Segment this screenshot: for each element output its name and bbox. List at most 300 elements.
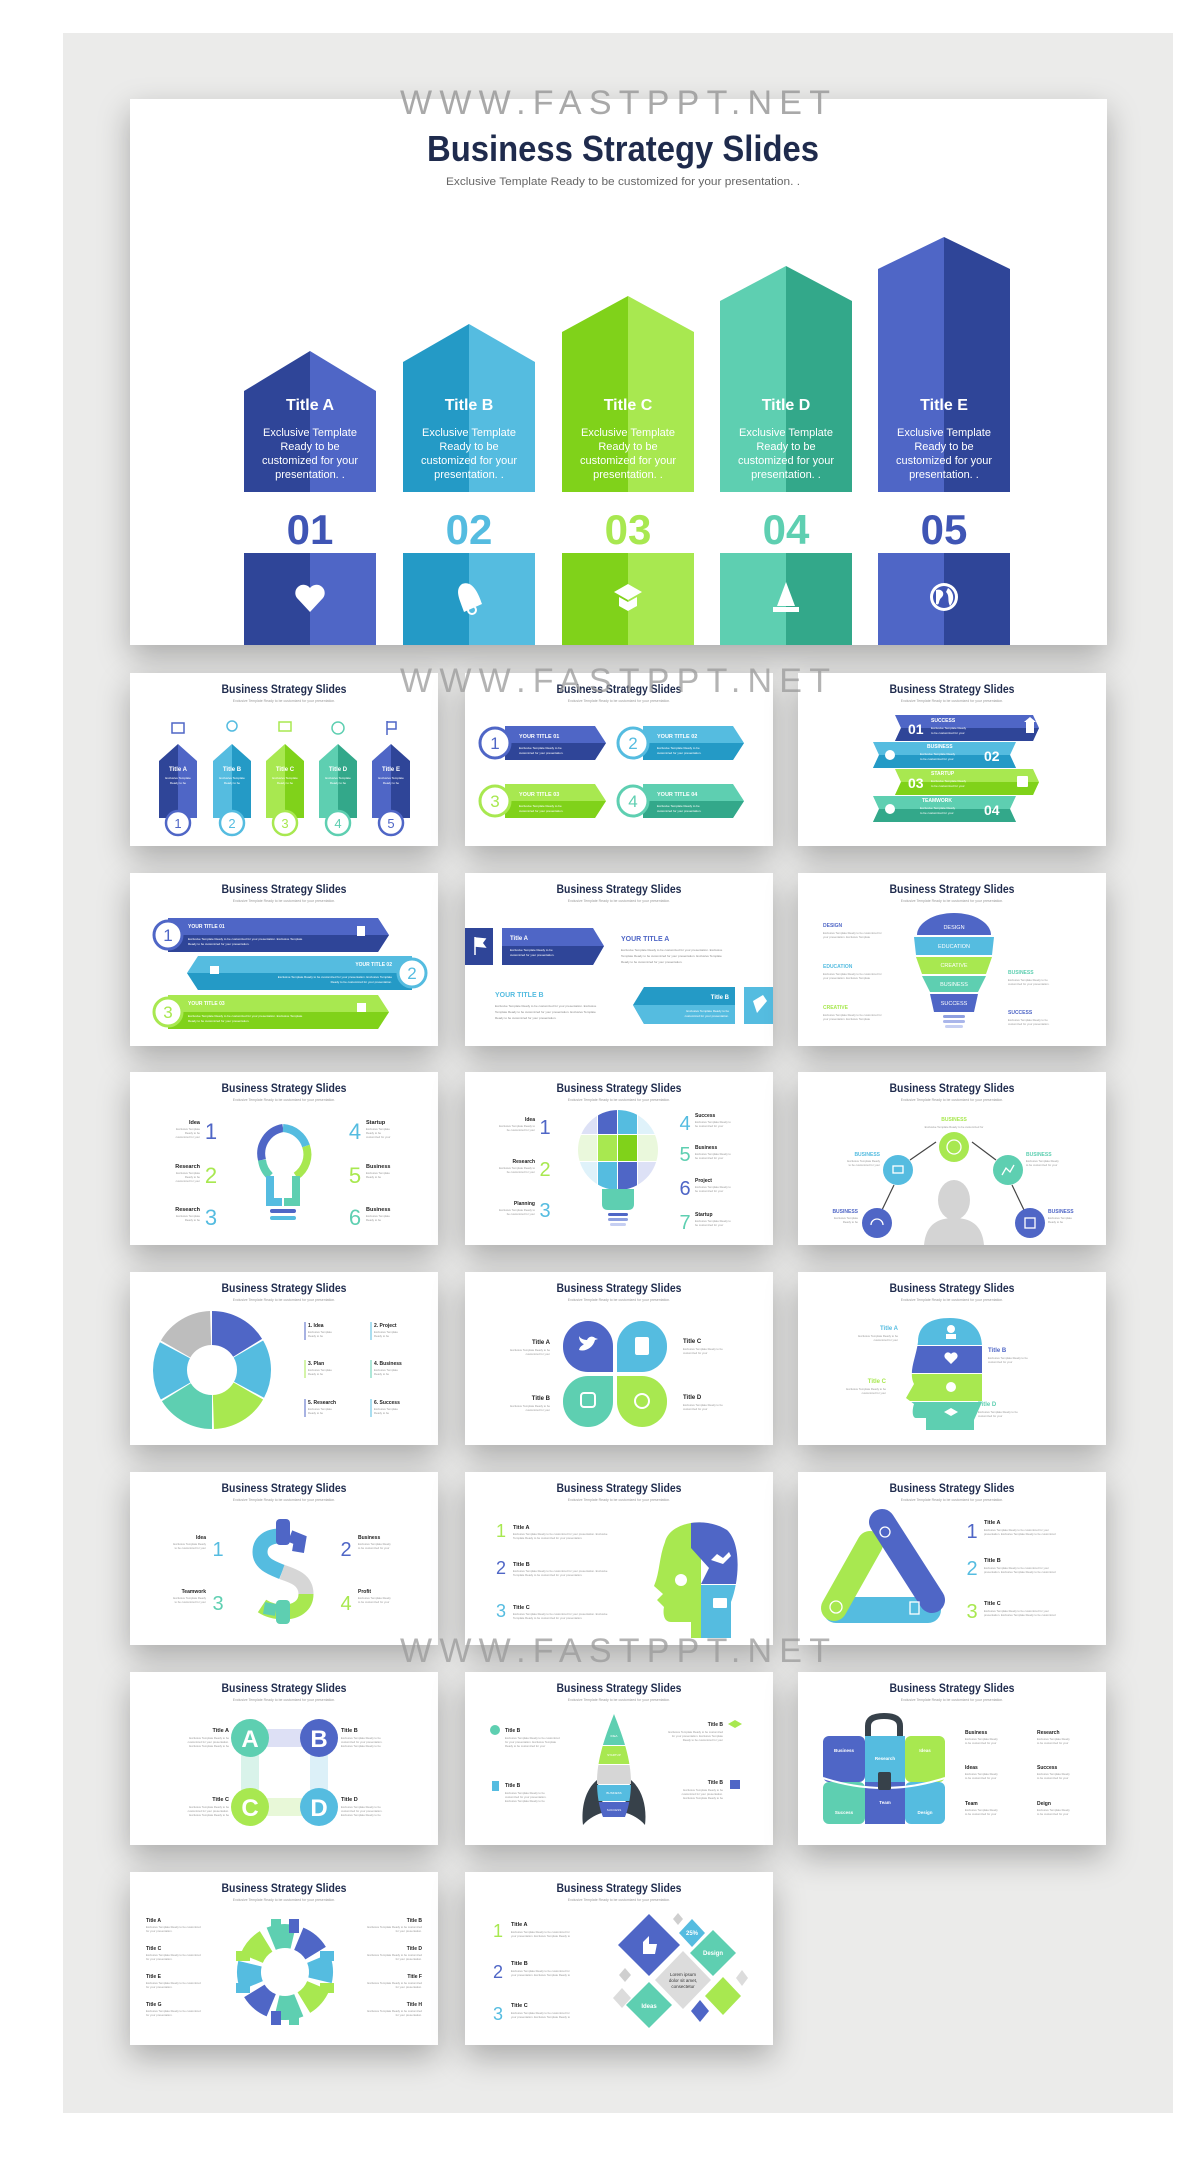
list labels: 6. Success	[374, 1400, 400, 1406]
thumb 18: briefcase: to be customized for your	[965, 1741, 996, 1745]
side labels: SUCCESS	[1008, 1010, 1033, 1016]
thumb 1: five arrows with icons	[130, 673, 438, 846]
thumb 19: gear of eight: for your presentation.	[146, 2013, 173, 2017]
icon box 3: graduation cap	[562, 553, 694, 645]
thumb title	[556, 882, 682, 903]
connectors and circles: C	[241, 1795, 259, 1822]
diamond cluster: Design	[703, 1951, 723, 1957]
thumb 11: four-leaf social: customized for your	[526, 1352, 550, 1356]
briefcase: Business	[834, 1748, 854, 1753]
thumb title: Exclusive Template Ready to be customized for your presentation.	[901, 899, 1003, 903]
watermark middle: WWW.FASTPPT.NET	[400, 662, 830, 700]
thumb 19: gear of eight: for your presentation.	[396, 1957, 422, 1961]
thumb 19: gear of eight: for your presentation.	[146, 1957, 173, 1961]
thumb 18: briefcase	[798, 1672, 1106, 1845]
arrow C: customized for your	[580, 455, 676, 467]
thumb 18: briefcase: Exclusive Template Ready	[965, 1772, 998, 1776]
numbered labels: 1	[966, 1521, 978, 1543]
labels: Title D	[683, 1395, 702, 1401]
column arrows: Title D	[329, 767, 348, 773]
thumb title: Business Strategy Slides	[890, 1281, 1015, 1295]
thumb 16: ABCD circles: Exclusive Template Ready to be	[341, 1813, 381, 1817]
thumb 19: gear of eight: for your presentation.	[146, 1985, 173, 1989]
labels: Title B	[708, 1780, 723, 1786]
list labels: Exclusive Template	[308, 1330, 332, 1334]
numbered labels: 7	[679, 1212, 691, 1234]
labels: Title A	[532, 1340, 551, 1346]
chevrons: 2	[628, 734, 638, 753]
thumb 20: diamonds: Exclusive Template Ready to be customized for	[511, 1969, 570, 1973]
thumb 16: ABCD circles: customized for your presentation.	[188, 1740, 229, 1744]
thumb title	[222, 1481, 347, 1502]
thumb 7: bulb outline 1-6: customized for your	[366, 1135, 390, 1139]
labels: BUSINESS	[941, 1117, 967, 1123]
thumb 11: four-leaf social: customized for your	[683, 1407, 707, 1411]
chevrons: YOUR TITLE 01	[519, 734, 559, 740]
labels: Title C	[146, 1946, 162, 1952]
chevrons: 3	[490, 792, 500, 811]
thumb 19: gear of eight: Exclusive Template Ready to be customized	[146, 1981, 201, 1985]
arrow A: presentation. .	[275, 469, 345, 481]
labels: customized for your presentation.	[682, 1792, 723, 1796]
labels: BUSINESS	[1026, 1152, 1052, 1158]
side labels: CREATIVE	[823, 1005, 849, 1011]
thumb 15: triangle cycle: Exclusive Template Ready to be customized for your	[984, 1609, 1049, 1613]
column arrows: Title B	[223, 767, 242, 773]
watermark top: WWW.FASTPPT.NET	[400, 84, 830, 122]
labels: Title C	[868, 1379, 887, 1385]
arrow A: Ready to be	[280, 441, 340, 453]
title A block: Title A	[510, 936, 529, 942]
thumb 8: bulb grid 1-7: Research	[512, 1159, 535, 1165]
thumb 13: dollar sign: Idea	[196, 1535, 206, 1541]
thumb 16: ABCD circles: Exclusive Template Ready to be	[189, 1736, 229, 1740]
chevrons: YOUR TITLE 04	[657, 792, 698, 798]
numbered labels: 2	[493, 1962, 503, 1982]
labels: Title B	[341, 1728, 358, 1734]
thumb title	[556, 1881, 682, 1902]
business circles	[862, 1132, 1045, 1238]
thumb 7: bulb outline 1-6: Exclusive Template	[176, 1214, 200, 1218]
side labels: customized for your presentation.	[1008, 982, 1050, 986]
thumb 17: rocket	[465, 1672, 773, 1845]
thumb 15: triangle cycle: presentation. Exclusive Template Ready to be customized	[984, 1532, 1056, 1536]
thumb title: Exclusive Template Ready to be customized for your presentation.	[568, 1298, 670, 1302]
arrow B: presentation. .	[434, 469, 504, 481]
main slide: business strategy arrows	[130, 99, 1107, 645]
labels: Title F	[407, 1974, 422, 1980]
title: Business Strategy Slides	[427, 128, 819, 169]
zigzag bands: to be customized for your	[920, 757, 954, 761]
labels	[532, 1339, 702, 1402]
thumb title: Exclusive Template Ready to be customized for your presentation.	[233, 1898, 335, 1902]
thumb 7: bulb outline 1-6: Ready to be	[185, 1218, 200, 1222]
connectors and circles: D	[310, 1795, 328, 1822]
arrow C: Title C	[604, 397, 653, 414]
connectors and circles	[231, 1719, 338, 1826]
arrow C: presentation. .	[593, 469, 663, 481]
side labels: Exclusive Template Ready to be	[1008, 1018, 1048, 1022]
numbered labels: 3	[205, 1205, 217, 1230]
side labels: Exclusive Template Ready to be customized for	[823, 972, 882, 976]
numbered labels: 4	[349, 1119, 361, 1144]
thumb title: Business Strategy Slides	[222, 882, 347, 896]
thumb title: Exclusive Template Ready to be customized for your presentation.	[901, 1498, 1003, 1502]
thumb 7: bulb outline 1-6: Business	[366, 1164, 390, 1170]
thumb title	[556, 682, 682, 703]
thumb 9: person with business circles: Exclusive Template Ready	[1026, 1159, 1059, 1163]
numbers: 02	[446, 506, 492, 553]
bulb bands: DESIGN	[943, 925, 965, 931]
thumb title	[222, 1081, 347, 1102]
thumb title	[890, 1081, 1015, 1102]
thumb 14: puzzle head 1-3: Exclusive Template Ready to be customized for your presentation. Exclusive	[513, 1532, 608, 1536]
thumb title: Business Strategy Slides	[890, 1481, 1015, 1495]
labels: customized for your presentation.	[505, 1795, 547, 1799]
thumb title: Business Strategy Slides	[556, 1081, 682, 1095]
labels: Title A	[212, 1728, 229, 1734]
arrow A: Exclusive Template	[263, 427, 357, 439]
labels: Title D	[978, 1402, 997, 1408]
numbered labels: 3	[496, 1601, 506, 1621]
thumb 9: person with business circles: Ready to be	[1048, 1220, 1064, 1224]
numbered labels: 5	[679, 1144, 691, 1166]
watermark lower: WWW.FASTPPT.NET	[400, 1632, 830, 1670]
thumb title	[556, 1481, 682, 1502]
labels: Title A	[146, 1918, 161, 1924]
bulb grid	[575, 1108, 662, 1226]
thumb 8: bulb grid 1-7: Exclusive Template Ready to	[499, 1124, 535, 1128]
thumb 7: bulb outline 1-6: Ready to be	[185, 1175, 200, 1179]
list labels: Exclusive Template	[308, 1407, 332, 1411]
thumb 9: person with business circles: Exclusive Template Ready to be customized for	[925, 1125, 983, 1129]
thumb 14: puzzle head 1-3	[465, 1472, 773, 1645]
bulb bands: BUSINESS	[940, 982, 968, 988]
list labels: Ready to be	[308, 1372, 324, 1376]
diamond cluster	[613, 1913, 748, 2028]
numbered labels	[539, 1113, 691, 1234]
thumb 16: ABCD circles: customized for your presentation.	[341, 1809, 383, 1813]
numbered labels: 3	[493, 2004, 503, 2024]
thumb 19: gear of eight: for your presentation.	[396, 1929, 422, 1933]
thumb 7: bulb outline 1-6: Ready to be	[185, 1131, 200, 1135]
column arrows: Ready to be	[170, 781, 186, 785]
thumb 14: puzzle head 1-3: Title A	[513, 1525, 530, 1531]
triangle	[830, 1522, 932, 1614]
thumb 8: bulb grid 1-7: Startup	[695, 1212, 712, 1218]
icon box 2: bell	[403, 553, 535, 645]
side labels: Exclusive Template Ready to be customized for	[823, 1013, 882, 1017]
arrow B: Title B	[445, 397, 493, 414]
side labels: Exclusive Template Ready to be customized for	[823, 931, 882, 935]
thumb 20: diamonds	[465, 1872, 773, 2045]
chevrons: customized for your presentation.	[519, 751, 564, 755]
thumb title	[556, 1081, 682, 1102]
thumb 12: head with four bands: customized for your	[874, 1338, 898, 1342]
thumb 12: head with four bands: customized for your	[862, 1391, 886, 1395]
labels: Title B	[407, 1918, 422, 1924]
thumb 9: person with business circles: Exclusive Template	[834, 1216, 858, 1220]
labels: Title H	[407, 2002, 422, 2008]
column arrows: Exclusive Template	[165, 776, 191, 780]
thumb 13: dollar sign: Exclusive Template Ready	[173, 1596, 207, 1600]
thumb 7: bulb outline 1-6: Research	[175, 1207, 201, 1213]
side labels: your presentation. Exclusive Template	[823, 935, 870, 939]
thumb 2: four numbered chevrons	[465, 673, 773, 846]
labels: Exclusive Template Ready to be	[505, 1799, 545, 1803]
subtitle: Exclusive Template Ready to be customized for your presentation. .	[446, 176, 800, 188]
zigzag bands: STARTUP	[931, 771, 955, 777]
thumb 7: bulb outline 1-6: Ready to be	[366, 1131, 382, 1135]
thumb 9: person with business circles: Exclusive Template Ready	[847, 1159, 881, 1163]
silhouette	[924, 1180, 984, 1245]
bulb bands: SUCCESS	[941, 1001, 968, 1007]
labels: for your presentation. Exclusive Template	[505, 1740, 557, 1744]
thumb title	[890, 1681, 1015, 1702]
head bands	[906, 1318, 982, 1430]
banners	[154, 918, 426, 1029]
thumb 13: dollar sign: Exclusive Template Ready	[358, 1596, 391, 1600]
bulb bands: EDUCATION	[938, 944, 970, 950]
thumb 14: puzzle head 1-3: Title B	[513, 1562, 530, 1568]
thumb title: Exclusive Template Ready to be customized for your presentation.	[568, 699, 670, 703]
thumb 16: ABCD circles: Exclusive Template Ready to be	[189, 1805, 229, 1809]
thumb 7: bulb outline 1-6: Exclusive Template	[366, 1214, 390, 1218]
thumb 8: bulb grid 1-7: Exclusive Template Ready to	[499, 1166, 535, 1170]
labels	[965, 1730, 1060, 1807]
thumb 14: puzzle head 1-3: Template Ready to be customized for your presentation.	[513, 1536, 583, 1540]
column arrows: Title C	[276, 767, 295, 773]
labels: Ready to be customized for your	[683, 1738, 723, 1742]
thumb 3: zigzag steps	[798, 673, 1106, 846]
labels	[212, 1728, 358, 1803]
side labels: EDUCATION	[823, 964, 853, 970]
thumb 20: diamonds: Exclusive Template Ready to be customized for	[511, 1930, 570, 1934]
arrow E: Ready to be	[914, 441, 974, 453]
thumb 15: triangle cycle	[798, 1472, 1106, 1645]
thumb 7: bulb outline 1-6: Exclusive Template	[366, 1171, 390, 1175]
column arrows: Ready to be	[330, 781, 346, 785]
column arrows: Ready to be	[277, 781, 293, 785]
thumb 7: bulb outline 1-6: Ready to be	[366, 1175, 382, 1179]
thumb title: Business Strategy Slides	[556, 682, 682, 696]
numbered labels: 4	[679, 1113, 691, 1135]
labels: Deign	[1037, 1801, 1051, 1807]
dollar shape	[260, 1519, 306, 1624]
column arrows: Title A	[169, 767, 188, 773]
numbers: 01	[287, 506, 333, 553]
numbered labels: 4	[340, 1593, 352, 1615]
title B block: customized for your presentation.	[685, 1014, 729, 1018]
arrow E: presentation. .	[909, 469, 979, 481]
numbered labels: 3	[212, 1593, 224, 1615]
labels: Title B	[988, 1348, 1007, 1354]
chevrons	[480, 726, 744, 818]
zigzag bands: Exclusive Template Ready	[920, 752, 956, 756]
thumb title: Business Strategy Slides	[556, 1281, 682, 1295]
list labels: Ready to be	[374, 1372, 390, 1376]
labels: Exclusive Template Ready to be	[683, 1796, 723, 1800]
thumb 8: bulb grid 1-7: be customized for your	[507, 1170, 535, 1174]
chevrons: 1	[490, 734, 500, 753]
thumb 7: bulb outline 1-6	[130, 1072, 438, 1245]
thumb 9: person with business circles: Ready to be	[843, 1220, 858, 1224]
banners: Exclusive Template Ready to be customized for your presentation. Exclusive Template	[188, 937, 303, 941]
icon box 5: globe	[878, 553, 1010, 645]
thumb 4: three long banners	[130, 873, 438, 1046]
thumb 20: diamonds: Title B	[511, 1961, 528, 1967]
diamond cluster: consectetur	[671, 1984, 695, 1989]
banners: Ready to be customized for your presentation.	[188, 942, 250, 946]
thumb title	[890, 882, 1015, 903]
thumb 13: dollar sign: to be customized for your	[358, 1600, 389, 1604]
thumb 13: dollar sign: Profit	[358, 1589, 371, 1595]
thumb 15: triangle cycle: presentation. Exclusive Template Ready to be customized	[984, 1570, 1056, 1574]
rocket: SUCCESS	[607, 1808, 621, 1812]
thumb 20: diamonds: Title A	[511, 1922, 528, 1928]
thumb title: Business Strategy Slides	[222, 1481, 347, 1495]
zigzag bands: BUSINESS	[927, 744, 953, 750]
arrow D: Exclusive Template	[739, 427, 833, 439]
thumb 18: briefcase: to be customized for your	[1037, 1812, 1068, 1816]
numbered circles: 3	[281, 816, 289, 831]
side labels: your presentation. Exclusive Template	[823, 976, 870, 980]
thumb 18: briefcase: to be customized for your	[965, 1776, 996, 1780]
thumb 14: puzzle head 1-3: Template Ready to be customized for your presentation.	[513, 1573, 583, 1577]
list labels: Exclusive Template	[374, 1368, 398, 1372]
column arrows: Ready to be	[224, 781, 240, 785]
title B block: Exclusive Template Ready to be	[686, 1009, 729, 1013]
thumb 12: head with four bands: Exclusive Template Ready to be	[846, 1387, 886, 1391]
connectors and circles: A	[241, 1726, 259, 1753]
thumb title: Business Strategy Slides	[890, 682, 1015, 696]
thumb 8: bulb grid 1-7: Exclusive Template Ready to	[695, 1152, 731, 1156]
thumb title	[556, 1681, 682, 1702]
numbered circles: 5	[387, 816, 395, 831]
numbered labels: 1	[205, 1119, 217, 1144]
numbers: 04	[763, 506, 810, 553]
numbered labels	[205, 1119, 361, 1230]
thumb title: Exclusive Template Ready to be customized for your presentation.	[568, 1698, 670, 1702]
title B block: Title B	[711, 995, 730, 1001]
thumb 20: diamonds: Exclusive Template Ready to be customized for	[511, 2011, 570, 2015]
numbered labels: 1	[493, 1921, 503, 1941]
top icons	[172, 721, 396, 735]
labels: Title B	[505, 1728, 521, 1734]
numbers: 03	[605, 506, 651, 553]
arrow B: customized for your	[421, 455, 517, 467]
zigzag bands: Exclusive Template Ready	[931, 779, 967, 783]
thumb 15: triangle cycle: Title C	[984, 1601, 1001, 1607]
diamond cluster: Ideas	[641, 2004, 657, 2010]
thumb title: Exclusive Template Ready to be customized for your presentation.	[568, 1898, 670, 1902]
side labels: DESIGN	[823, 923, 843, 929]
zigzag bands: 04	[984, 802, 1000, 818]
numbered labels: 6	[349, 1205, 361, 1230]
thumb title: Exclusive Template Ready to be customized for your presentation.	[901, 1698, 1003, 1702]
thumb 7: bulb outline 1-6: Ready to be	[366, 1218, 382, 1222]
thumb 7: bulb outline 1-6: Business	[366, 1207, 390, 1213]
thumb 15: triangle cycle: presentation. Exclusive Template Ready to be customized	[984, 1613, 1056, 1617]
title B block: YOUR TITLE B	[495, 992, 544, 999]
column arrows: Exclusive Template	[325, 776, 351, 780]
numbered labels: 1	[496, 1521, 506, 1541]
thumb title: Exclusive Template Ready to be customized for your presentation.	[901, 1298, 1003, 1302]
arrow E: Title E	[920, 397, 968, 414]
labels: Title B	[505, 1783, 521, 1789]
thumb 7: bulb outline 1-6: customized for your	[176, 1135, 200, 1139]
head puzzle	[654, 1522, 738, 1638]
zigzag bands: to be customized for your	[931, 731, 965, 735]
thumb 7: bulb outline 1-6: Exclusive Template	[176, 1127, 200, 1131]
arrow D: presentation. .	[751, 469, 821, 481]
briefcase: Research	[875, 1756, 895, 1761]
thumb 13: dollar sign: to be customized for your	[175, 1600, 206, 1604]
labels: Team	[965, 1801, 978, 1807]
labels: Success	[1037, 1765, 1058, 1771]
side labels	[823, 923, 1050, 1026]
column arrows: Ready to be	[383, 781, 399, 785]
thumb 8: bulb grid 1-7	[465, 1072, 773, 1245]
rocket	[583, 1712, 645, 1825]
title A block: Template Ready to be customized for your presentation. Exclusive Template	[621, 954, 722, 958]
connectors and circles: B	[310, 1726, 328, 1753]
thumb 12: head with four bands: customized for your	[988, 1360, 1012, 1364]
list labels: 5. Research	[308, 1400, 336, 1406]
column arrows: Exclusive Template	[378, 776, 404, 780]
thumb 19: gear of eight: Exclusive Template Ready to be customized	[367, 1925, 422, 1929]
thumb 12: head with four bands	[798, 1272, 1106, 1445]
thumb 19: gear of eight: Exclusive Template Ready to be customized	[146, 1953, 201, 1957]
column arrows: Exclusive Template	[219, 776, 245, 780]
diamond cluster: 25%	[686, 1931, 699, 1937]
thumb 11: four-leaf social: Exclusive Template Ready to be	[683, 1403, 723, 1407]
thumb 15: triangle cycle: Exclusive Template Ready to be customized for your	[984, 1566, 1049, 1570]
numbered labels	[493, 1921, 503, 2024]
numbered labels	[966, 1521, 978, 1623]
thumb 8: bulb grid 1-7: Project	[695, 1178, 712, 1184]
thumb 7: bulb outline 1-6: Research	[175, 1164, 201, 1170]
labels: Title B	[532, 1396, 551, 1402]
thumb 19: gear of eight: Exclusive Template Ready to be customized	[367, 2009, 422, 2013]
numbered labels: 5	[349, 1163, 361, 1188]
arrow E: Exclusive Template	[897, 427, 991, 439]
thumb 13: dollar sign: to be customized for your	[175, 1546, 206, 1550]
banners: Ready to be customized for your presentation.	[188, 1019, 250, 1023]
thumb 12: head with four bands: Exclusive Template Ready to be	[858, 1334, 898, 1338]
briefcase: Success	[835, 1810, 854, 1815]
labels: Title D	[341, 1797, 358, 1803]
zigzag bands: TEAMWORK	[922, 798, 952, 804]
thumb 15: triangle cycle: Title B	[984, 1558, 1001, 1564]
arrow A: Title A	[286, 397, 334, 414]
thumb 9: person with business circles: to be customized for your	[849, 1163, 880, 1167]
title B block: Exclusive Template Ready to be customized for your presentation. Exclusive	[495, 1004, 597, 1008]
arrow E: customized for your	[896, 455, 992, 467]
thumb 8: bulb grid 1-7: be customized for your	[695, 1223, 723, 1227]
thumb title: Business Strategy Slides	[890, 1081, 1015, 1095]
labels: Title A	[880, 1326, 899, 1332]
thumb 18: briefcase: to be customized for your	[1037, 1741, 1068, 1745]
banners: 2	[407, 964, 417, 983]
bulb bands	[914, 913, 994, 1028]
thumb 7: bulb outline 1-6: customized for your	[176, 1179, 200, 1183]
thumb 11: four-leaf social: Exclusive Template Ready to be	[510, 1404, 550, 1408]
thumb 8: bulb grid 1-7: Business	[695, 1145, 717, 1151]
chevrons: Exclusive Template Ready to be	[657, 804, 700, 808]
thumb 19: gear of eight: Exclusive Template Ready to be customized	[146, 2009, 201, 2013]
side labels: BUSINESS	[1008, 970, 1034, 976]
